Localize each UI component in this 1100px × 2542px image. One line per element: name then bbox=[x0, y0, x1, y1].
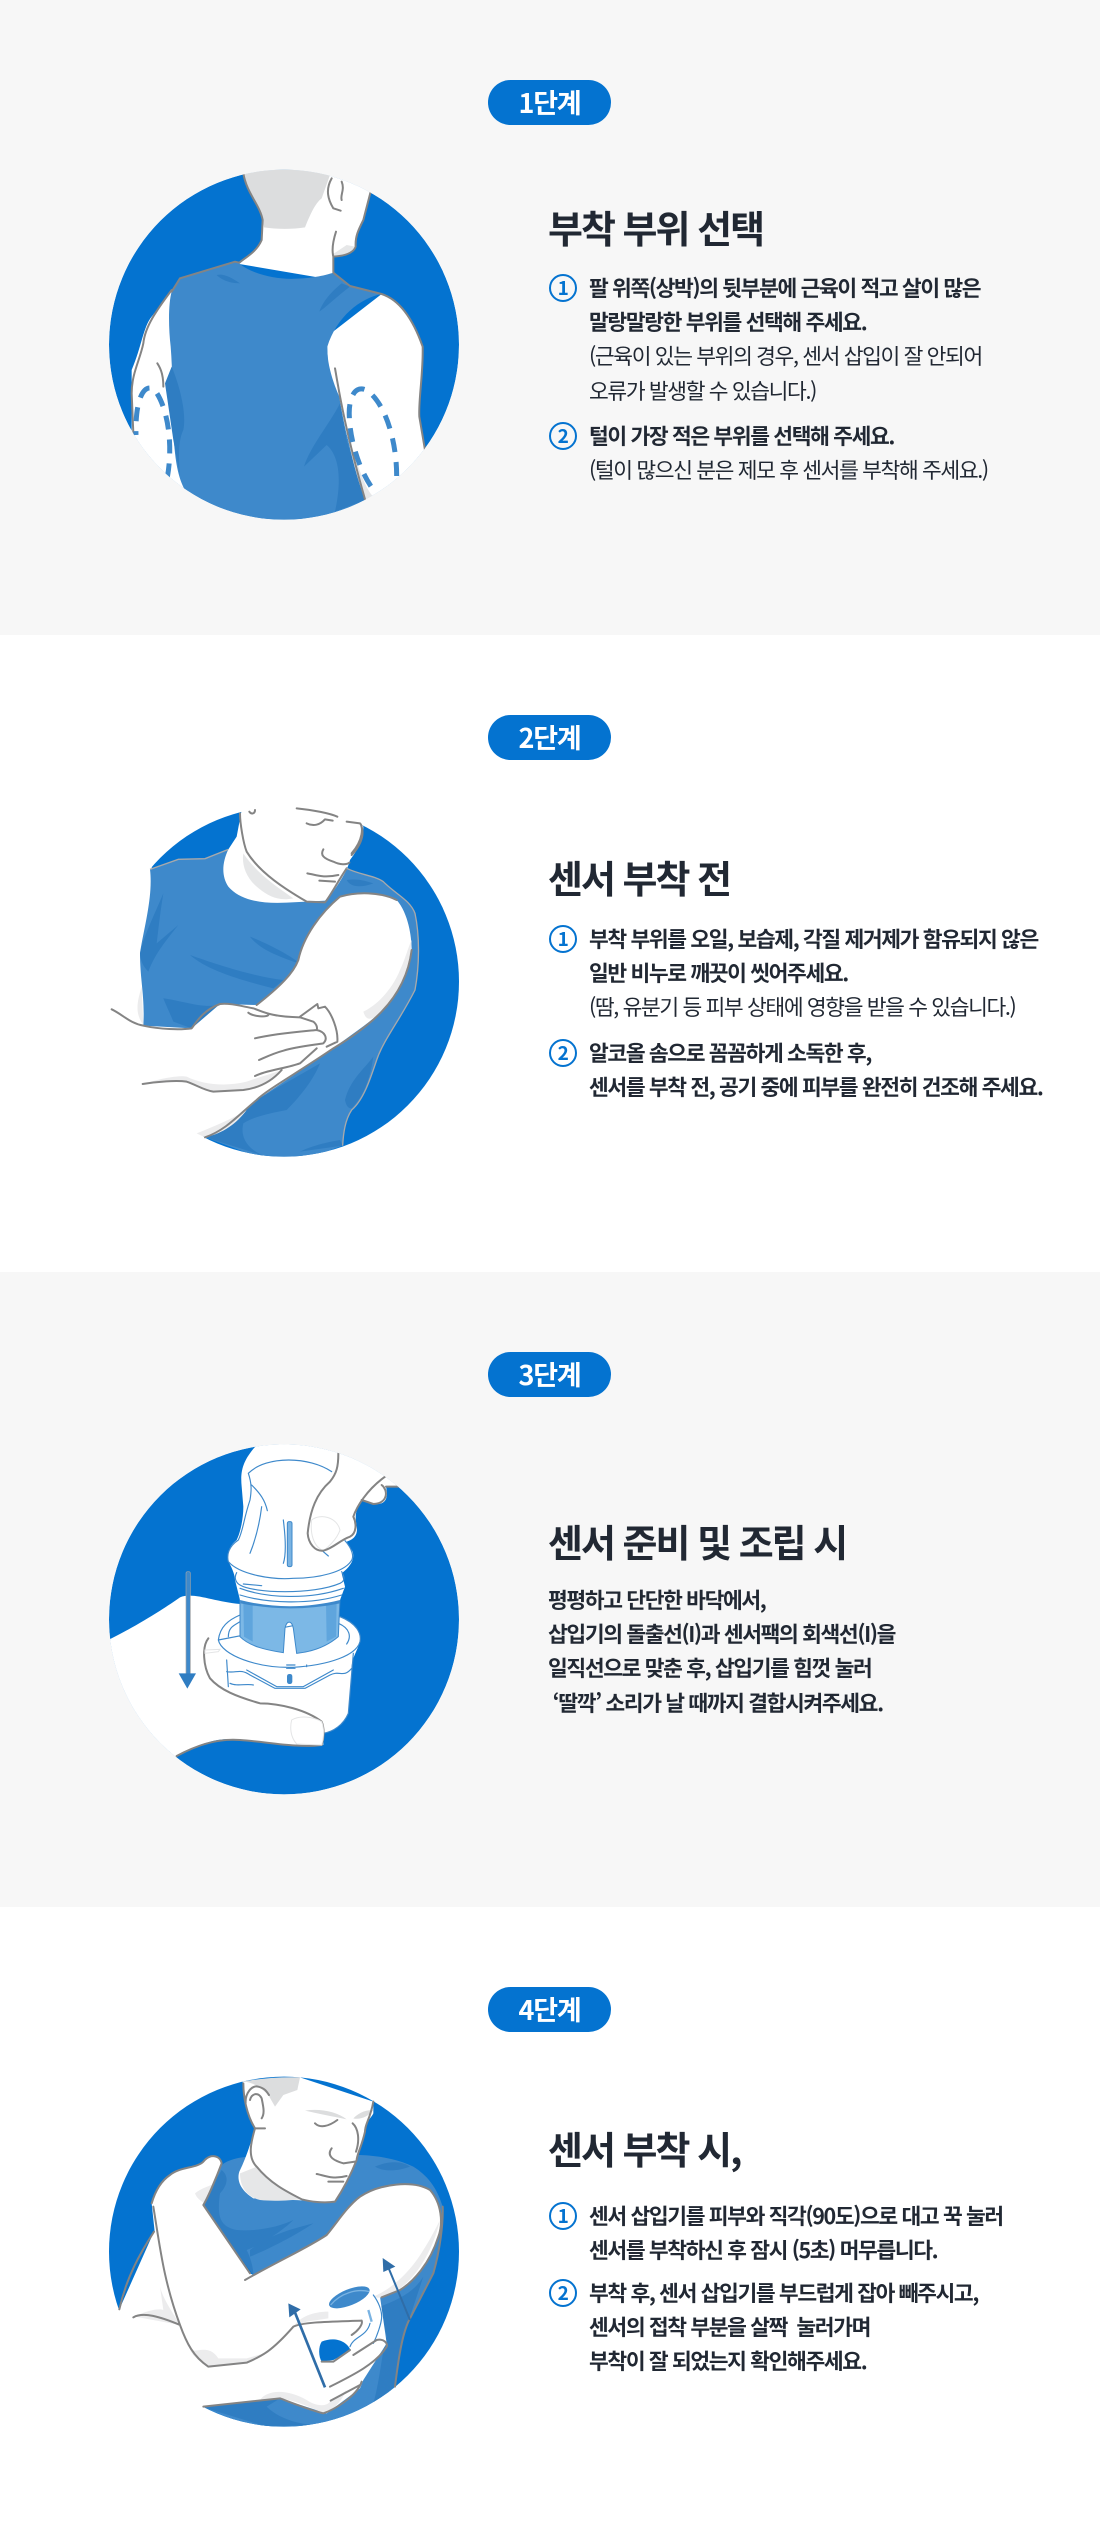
blue gap behind the fingers bbox=[319, 2339, 351, 2362]
instruction 2 bbox=[549, 2277, 978, 2376]
instruction 1: 부착 부위를 오일, 보습제, 각질 제거제가 함유되지 않은 bbox=[589, 923, 1038, 954]
illustration: assembling applicator and sensor pack bbox=[109, 1444, 459, 1794]
instruction 2 bbox=[549, 1037, 1043, 1102]
heading: 센서 부착 전 bbox=[548, 849, 730, 904]
number badge 1: 1 bbox=[558, 925, 569, 952]
instruction 2: 센서의 접착 부분을 살짝 눌러가며 bbox=[589, 2311, 870, 2342]
arrows: direction of application bbox=[288, 2258, 410, 2387]
number badge 2 bbox=[549, 2279, 577, 2307]
heading: 부착 부위 선택 bbox=[548, 199, 763, 254]
instruction 1: 말랑말랑한 부위를 선택해 주세요. bbox=[589, 306, 866, 337]
instruction 1 bbox=[549, 272, 982, 406]
instruction 2: 털이 가장 적은 부위를 선택해 주세요. bbox=[589, 420, 894, 451]
sensor applicator bbox=[326, 2282, 382, 2352]
number badge 2 bbox=[549, 1039, 577, 1067]
instruction 2: 부착 후, 센서 삽입기를 부드럽게 잡아 빼주시고, bbox=[589, 2277, 978, 2308]
instruction 2: 센서를 부착 전, 공기 중에 피부를 완전히 건조해 주세요. bbox=[589, 1071, 1043, 1102]
number badge 1 bbox=[549, 2202, 577, 2230]
number badge 2: 2 bbox=[558, 2279, 569, 2306]
number badge 2: 2 bbox=[558, 422, 569, 449]
number badge 1 bbox=[549, 274, 577, 302]
instruction 2: 부착이 잘 되었는지 확인해주세요. bbox=[589, 2345, 866, 2376]
instruction paragraph: ‘딸깍’ 소리가 날 때까지 결합시켜주세요. bbox=[553, 1687, 883, 1718]
instruction paragraph: 평평하고 단단한 바닥에서, bbox=[548, 1584, 765, 1615]
instruction 1: (땀, 유분기 등 피부 상태에 영향을 받을 수 있습니다.) bbox=[589, 991, 1015, 1022]
step badge: 1단계: 1단계 bbox=[518, 82, 580, 121]
instruction 1: 센서 삽입기를 피부와 직각(90도)으로 대고 꾹 눌러 bbox=[589, 2200, 1003, 2231]
step badge: 3단계 bbox=[488, 1352, 611, 1397]
instruction 1 bbox=[549, 2200, 1003, 2265]
instruction 2: (털이 많으신 분은 제모 후 센서를 부착해 주세요.) bbox=[589, 454, 988, 485]
panel: step 1 bbox=[109, 80, 988, 520]
instruction 1: (근육이 있는 부위의 경우, 센서 삽입이 잘 안되어 bbox=[589, 340, 982, 371]
step badge: 3단계: 3단계 bbox=[518, 1354, 580, 1393]
step badge: 4단계: 4단계 bbox=[518, 1989, 580, 2028]
arrow: press down bbox=[179, 1572, 196, 1689]
heading: 센서 부착 시, bbox=[548, 2120, 740, 2175]
panel: step 3 bbox=[109, 1352, 896, 1794]
instruction 2: 알코올 솜으로 꼼꼼하게 소독한 후, bbox=[589, 1037, 871, 1068]
heading: 센서 준비 및 조립 시 bbox=[548, 1513, 846, 1568]
number badge 2 bbox=[549, 422, 577, 450]
number badge 1: 1 bbox=[558, 2202, 569, 2229]
number badge 2: 2 bbox=[558, 1039, 569, 1066]
instruction 1: 팔 위쪽(상박)의 뒷부분에 근육이 적고 살이 많은 bbox=[589, 272, 980, 303]
step badge: 2단계 bbox=[488, 715, 611, 760]
step badge: 2단계: 2단계 bbox=[518, 717, 580, 756]
instruction 1: 오류가 발생할 수 있습니다.) bbox=[589, 375, 816, 406]
instruction 1 bbox=[549, 923, 1038, 1022]
instruction 2 bbox=[549, 420, 988, 485]
illustration: pressing the applicator on the arm bbox=[109, 2076, 459, 2427]
step badge: 1단계 bbox=[488, 80, 611, 125]
instruction paragraph: 삽입기의 돌출선(I)과 센서팩의 회색선(I)을 bbox=[548, 1618, 895, 1649]
panel: step 2 bbox=[110, 715, 1042, 1157]
illustration: cleaning the skin before attaching bbox=[110, 807, 459, 1157]
illustration: back of upper arm attachment area bbox=[109, 170, 459, 520]
number badge 1 bbox=[549, 925, 577, 953]
panel: step 4 bbox=[109, 1987, 1002, 2427]
instruction paragraph: 일직선으로 맞춘 후, 삽입기를 힘껏 눌러 bbox=[548, 1652, 871, 1683]
number badge 1: 1 bbox=[558, 274, 569, 301]
instruction 1: 일반 비누로 깨끗이 씻어주세요. bbox=[589, 957, 848, 988]
instruction paragraph bbox=[548, 1584, 896, 1718]
instruction 1: 센서를 부착하신 후 잠시 (5초) 머무릅니다. bbox=[589, 2234, 937, 2265]
step badge: 4단계 bbox=[488, 1987, 611, 2032]
